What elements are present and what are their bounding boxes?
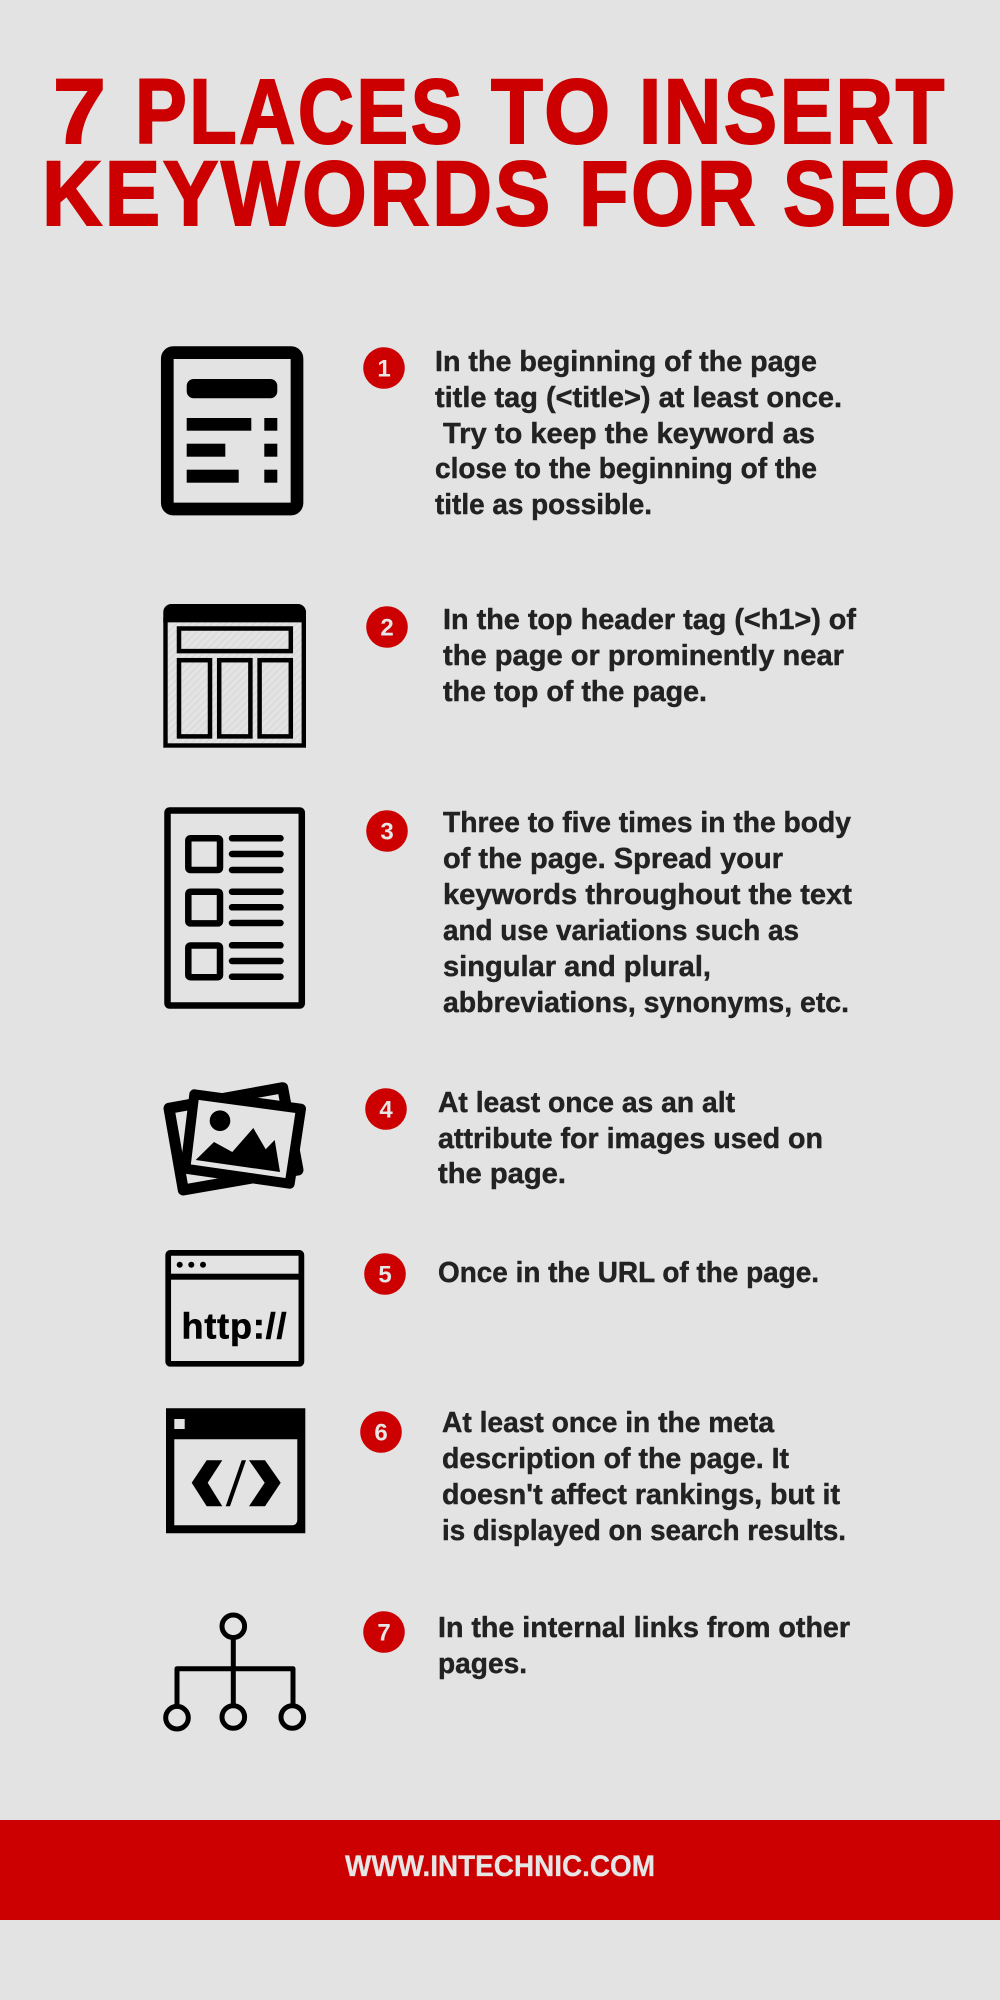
text: item 3: keywords throughout the text	[443, 879, 852, 911]
item 5: URL	[166, 1253, 819, 1364]
number badge 4	[365, 1088, 407, 1130]
number badge 4: 4	[379, 1096, 393, 1124]
text: item 3: abbreviations, synonyms, etc.	[443, 987, 849, 1019]
footer url: WWW.INTECHNIC.COM	[345, 1850, 655, 1883]
icon: list document	[168, 810, 302, 1006]
text: item 1: Try to keep the keyword as	[443, 418, 815, 450]
text: item 1: title tag (<title>) at least once.	[435, 382, 842, 414]
item 7: internal links	[166, 1611, 850, 1729]
item 1: page title tag	[167, 346, 842, 521]
text: item 3	[443, 807, 852, 1019]
icon: code window	[166, 1408, 305, 1533]
text: item 3: and use variations such as	[443, 915, 799, 947]
text: item 6: At least once in the meta	[442, 1407, 775, 1439]
text: item 6: is displayed on search results.	[442, 1515, 846, 1547]
text: item 2	[443, 604, 856, 708]
number badge 6: 6	[374, 1420, 388, 1446]
text: item 3: singular and plural,	[443, 951, 711, 983]
text: item 1: title as possible.	[435, 489, 652, 521]
number badge 7: 7	[377, 1620, 391, 1646]
number badge 3	[366, 810, 408, 852]
text: item 2: the page or prominently near	[443, 640, 844, 672]
icon: browser with http: http://	[182, 1305, 286, 1346]
text: item 4: At least once as an alt	[438, 1087, 735, 1119]
text: item 1: In the beginning of the page	[435, 346, 817, 378]
title: TO	[491, 61, 613, 163]
number badge 2	[366, 606, 408, 648]
number badge 5	[364, 1253, 406, 1295]
footer band	[0, 1820, 1000, 1920]
title	[42, 61, 958, 245]
text: item 2: the top of the page.	[443, 676, 707, 708]
icon: document with title bar	[167, 353, 297, 509]
number badge 1	[363, 347, 405, 389]
title: INSERT	[639, 61, 947, 163]
item 2: header tag	[163, 604, 856, 746]
number badge 2: 2	[380, 614, 394, 642]
title: 7	[53, 61, 109, 163]
text: item 7: In the internal links from other	[438, 1612, 850, 1644]
text: item 2: In the top header tag (<h1>) of	[443, 604, 856, 636]
text: item 3: Three to five times in the body	[443, 807, 851, 839]
text: item 7	[438, 1612, 850, 1680]
text: item 4: the page.	[438, 1158, 566, 1190]
text: item 1	[435, 346, 842, 521]
text: item 7: pages.	[438, 1648, 527, 1680]
title: KEYWORDS	[42, 143, 553, 245]
icon: stacked photos	[169, 1088, 301, 1190]
icon: page layout	[163, 604, 306, 746]
text: item 1: close to the beginning of the	[435, 453, 817, 485]
item 3: body of the page	[168, 807, 852, 1019]
icon: browser with http	[166, 1253, 302, 1364]
number badge 1: 1	[377, 356, 391, 382]
title: PLACES	[135, 61, 465, 163]
text: item 6	[442, 1407, 846, 1547]
text: item 4	[438, 1087, 823, 1190]
number badge 3: 3	[380, 818, 394, 846]
text: item 6: doesn't affect rankings, but it	[442, 1479, 840, 1511]
text: item 5: Once in the URL of the page.	[438, 1257, 819, 1289]
number badge 5: 5	[378, 1262, 392, 1288]
title: SEO	[783, 143, 958, 245]
number badge 6	[360, 1411, 402, 1453]
text: item 6: description of the page. It	[442, 1443, 789, 1475]
number badge 7	[363, 1611, 405, 1653]
icon: link hierarchy	[166, 1615, 304, 1729]
title: FOR	[579, 143, 758, 245]
item 4: image alt attribute	[169, 1087, 823, 1190]
text: item 3: of the page. Spread your	[443, 843, 783, 875]
item 6: meta description	[166, 1407, 846, 1547]
text: item 4: attribute for images used on	[438, 1123, 823, 1155]
